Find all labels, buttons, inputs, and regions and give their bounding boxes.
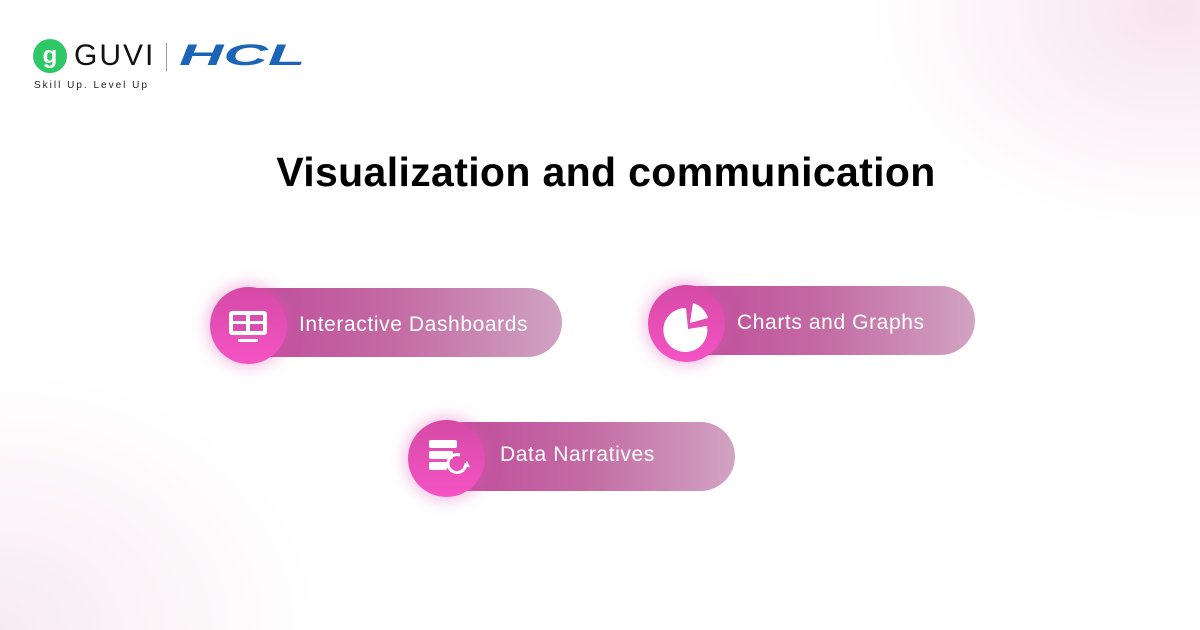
panel: data narratives: Data Narratives — [500, 443, 655, 466]
icon: guvi circle: g — [43, 42, 57, 69]
icon: dashboard — [210, 287, 287, 364]
icon: pie chart — [648, 285, 725, 362]
panel: charts and graphs: Charts and Graphs — [737, 311, 925, 334]
icon: guvi circle — [33, 39, 67, 73]
tagline: Skill Up. Level Up — [34, 80, 149, 91]
hcl text: HCL — [179, 39, 305, 72]
panel: charts and graphs — [638, 274, 975, 372]
guvi text: GUVI — [74, 39, 155, 72]
logo — [33, 39, 305, 91]
panel: interactive dashboards — [200, 276, 562, 374]
panel: data narratives — [398, 410, 735, 508]
title: Visualization and communication — [276, 149, 936, 195]
panel: interactive dashboards: Interactive Dashboards — [299, 313, 528, 336]
icon: data narratives — [408, 420, 485, 497]
